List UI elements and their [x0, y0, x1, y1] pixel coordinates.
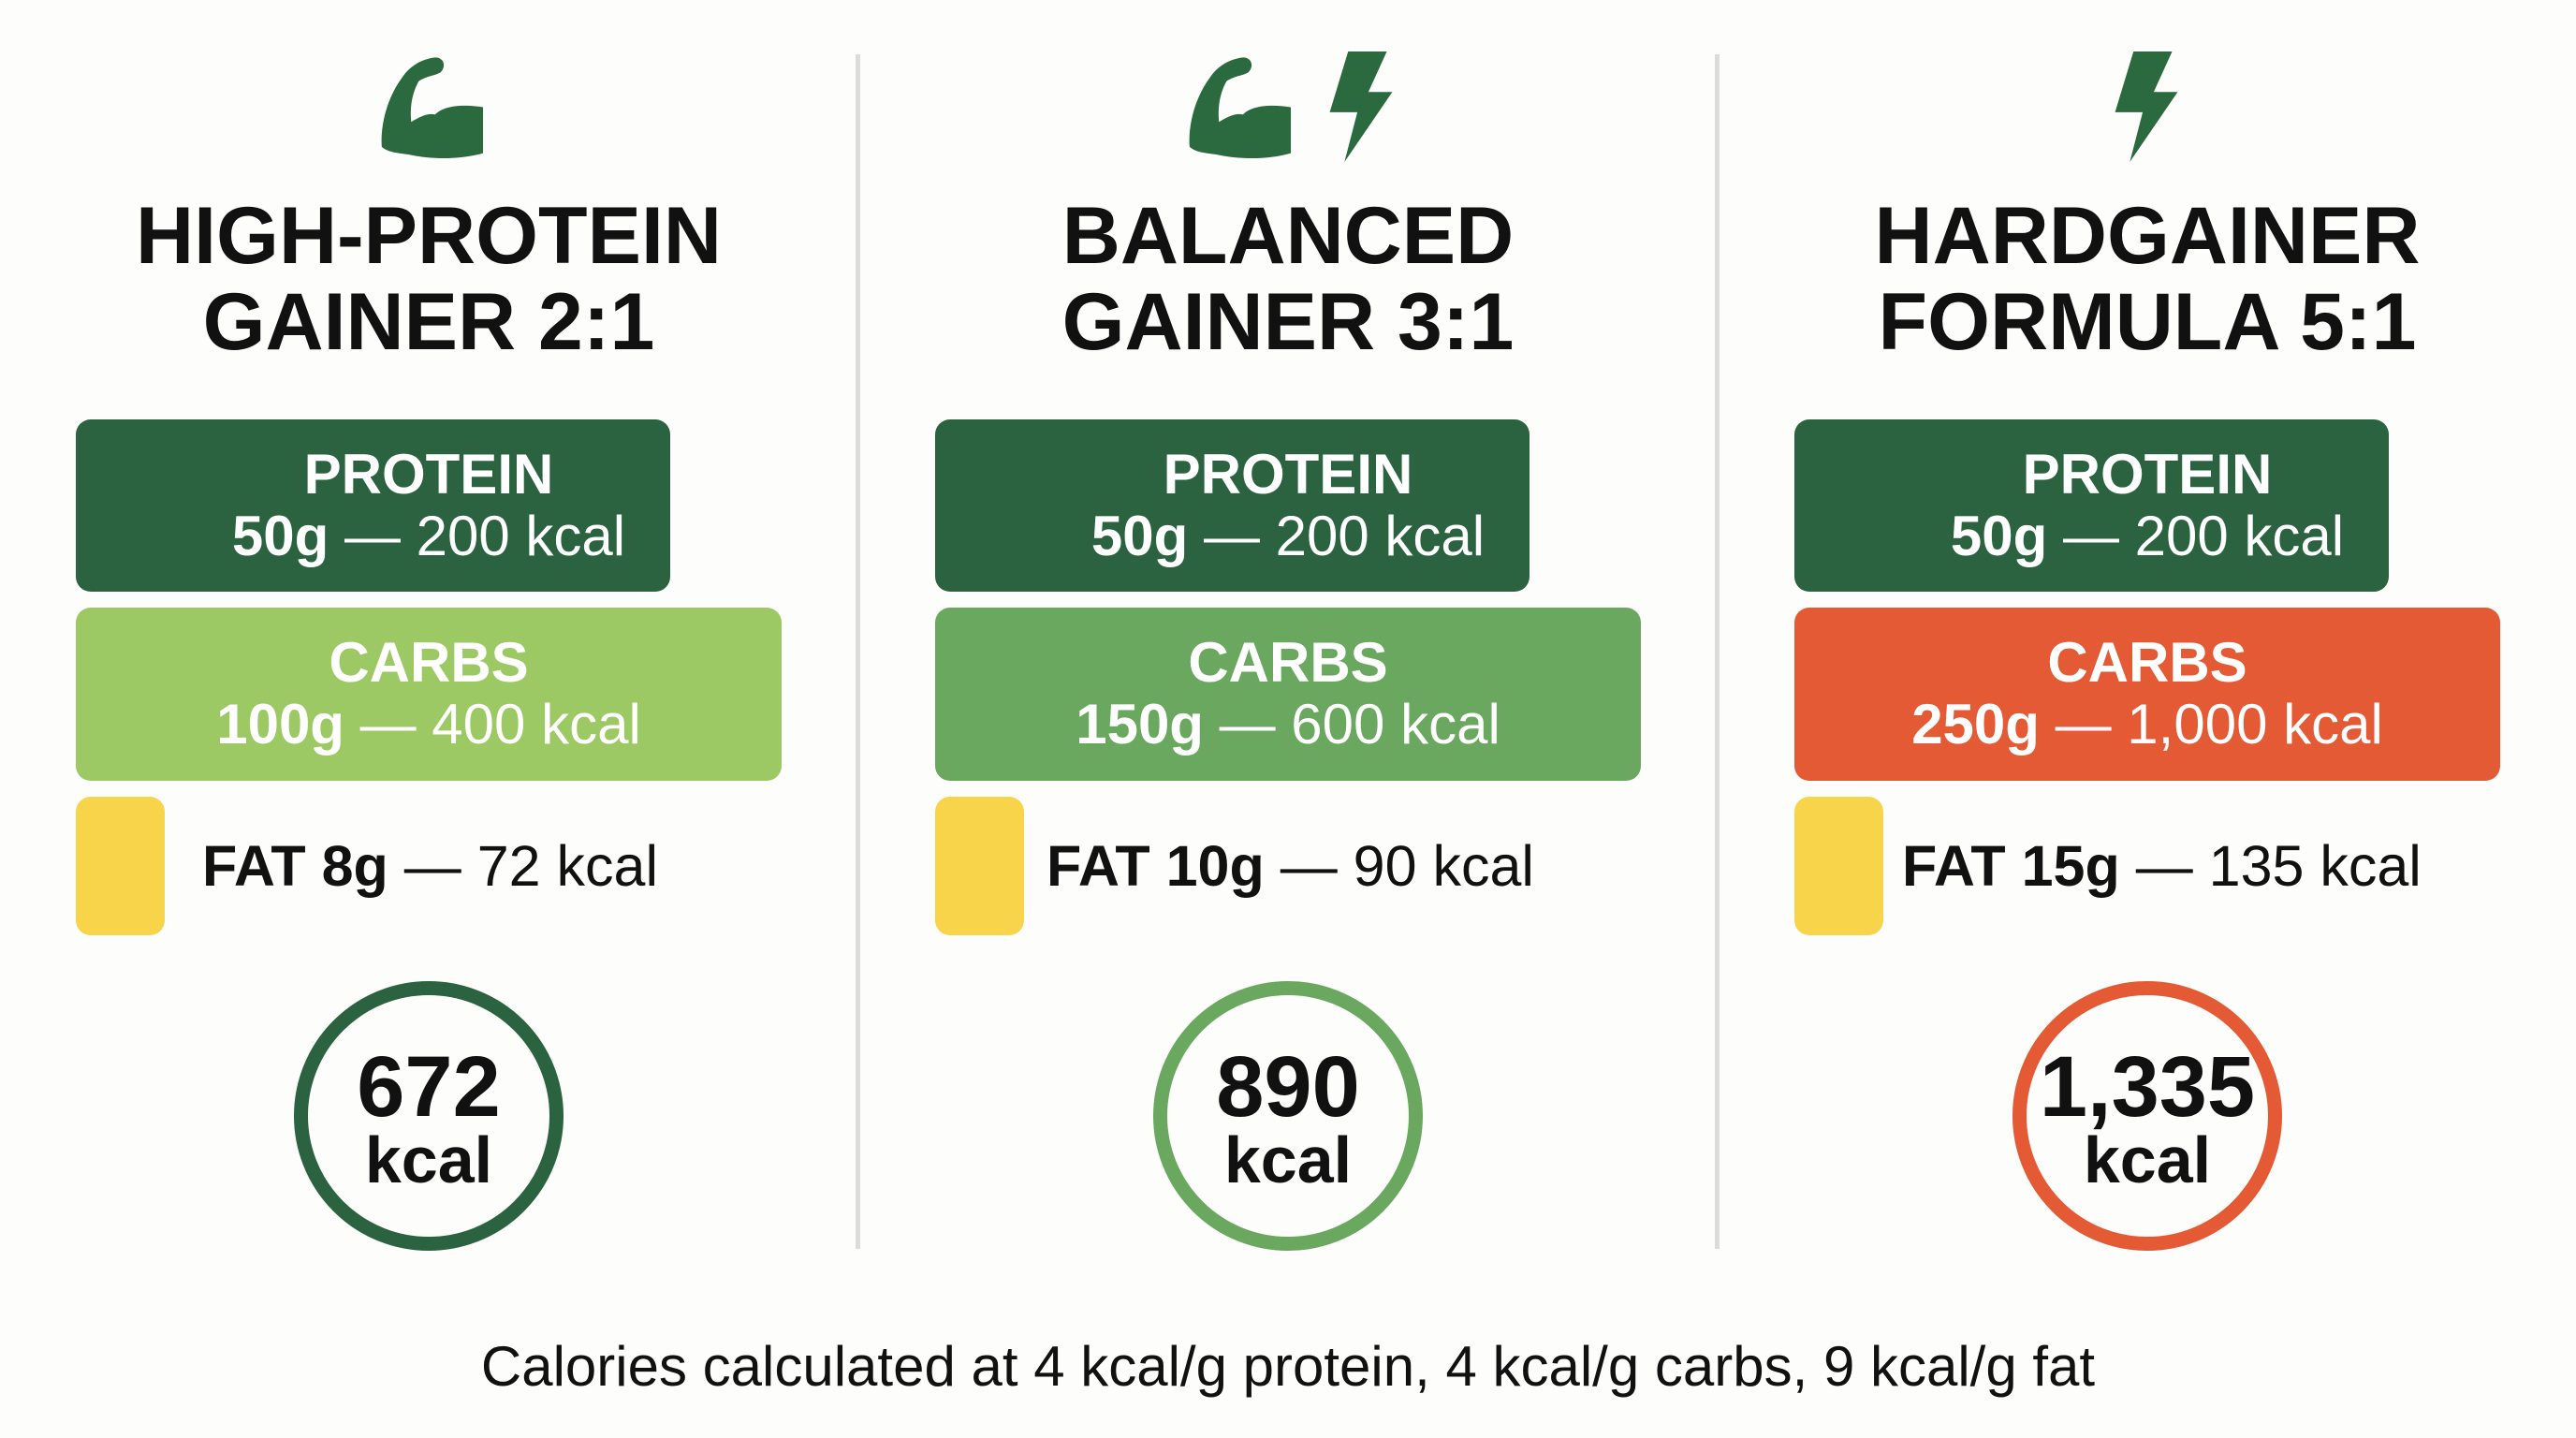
text: fat col2: FAT 10g — 90 kcal	[1046, 834, 1534, 898]
circle total col3	[2012, 981, 2282, 1251]
panel: carbs col2	[935, 608, 1641, 781]
circle total col2: kcal	[1224, 1123, 1352, 1196]
panel: carbs col1	[76, 608, 782, 781]
circle total col2	[1153, 981, 1423, 1251]
panel: protein col3: PROTEIN	[2023, 443, 2272, 506]
title col2: BALANCED	[1062, 191, 1514, 281]
panel: protein col1	[76, 419, 670, 592]
panel: carbs col2: 150g — 600 kcal	[1076, 693, 1500, 756]
panel: carbs col3: 250g — 1,000 kcal	[1911, 693, 2383, 756]
title col2: GAINER 3:1	[1062, 277, 1514, 367]
text: fat col1: FAT 8g — 72 kcal	[202, 834, 658, 898]
title col1: GAINER 2:1	[203, 277, 654, 367]
title col1	[136, 191, 722, 367]
icon: muscle arm col2	[1189, 57, 1292, 158]
panel: carbs col1: 100g — 400 kcal	[216, 693, 641, 756]
title col3	[1875, 191, 2420, 367]
panel: protein col3	[1794, 419, 2389, 592]
title col3: FORMULA 5:1	[1879, 277, 2416, 367]
circle total col3: 1,335	[2040, 1039, 2255, 1135]
panel: protein col1: PROTEIN	[304, 443, 553, 506]
panel: carbs col2: CARBS	[1188, 631, 1388, 694]
panel: carbs col1: CARBS	[329, 631, 529, 694]
footer note: Calories calculated at 4 kcal/g protein, 4 kcal/g carbs, 9 kcal/g fat	[481, 1335, 2095, 1398]
panel: carbs col3	[1794, 608, 2500, 781]
title col2	[1062, 191, 1514, 367]
panel: protein col3: 50g — 200 kcal	[1951, 505, 2344, 567]
panel: protein col2	[935, 419, 1530, 592]
title col3: HARDGAINER	[1875, 191, 2420, 281]
circle total col1: 672	[357, 1039, 501, 1135]
circle total col1: kcal	[365, 1123, 492, 1196]
panel: carbs col3: CARBS	[2047, 631, 2247, 694]
circle total col3: kcal	[2084, 1123, 2211, 1196]
circle total col2: 890	[1216, 1039, 1360, 1135]
panel: protein col2: 50g — 200 kcal	[1091, 505, 1485, 567]
title col1: HIGH-PROTEIN	[136, 191, 722, 281]
icon: fat col2	[935, 797, 1024, 935]
circle total col1	[294, 981, 564, 1251]
icon: bolt col3	[2115, 51, 2177, 162]
icon: bolt col2	[1329, 51, 1393, 162]
panel: protein col1: 50g — 200 kcal	[232, 505, 625, 567]
icon: fat col1	[76, 797, 165, 935]
text: fat col3: FAT 15g — 135 kcal	[1902, 834, 2422, 898]
icon: fat col3	[1794, 797, 1883, 935]
panel: protein col2: PROTEIN	[1164, 443, 1412, 506]
icon: muscle arm col1	[382, 57, 483, 158]
